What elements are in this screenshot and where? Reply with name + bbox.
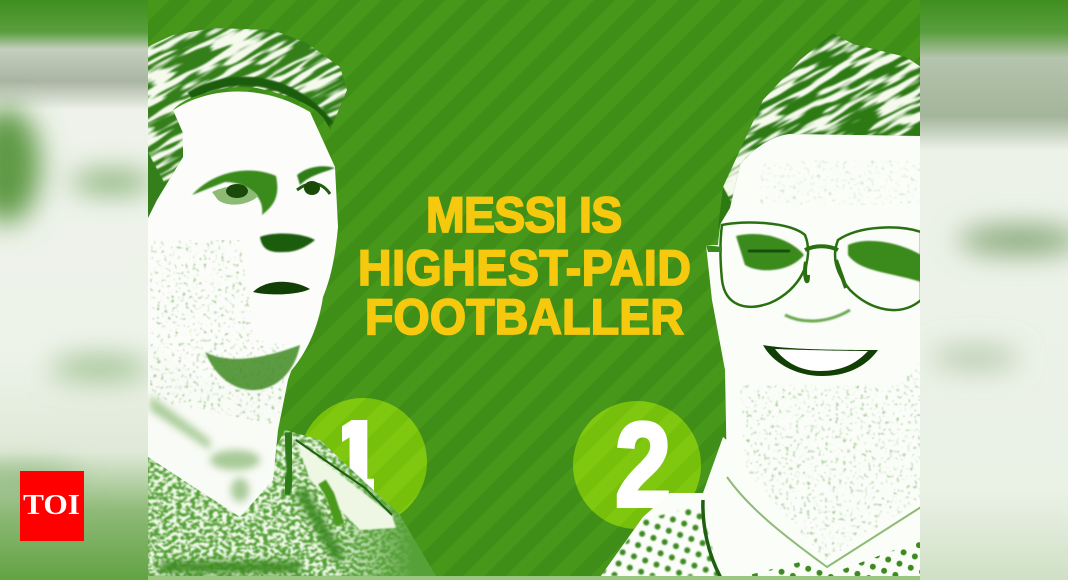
Messi chin shadow [205, 345, 300, 390]
Messi sleeve highlight [286, 432, 396, 530]
badge: number 2: 2 [615, 399, 671, 532]
Ronaldo smile [763, 345, 878, 376]
Ronaldo shirt and collar [598, 437, 921, 580]
portrait: Ronaldo [600, 33, 920, 576]
footer strip [148, 576, 920, 580]
Messi face [148, 91, 338, 380]
Messi neck shading [150, 395, 260, 502]
title [358, 187, 691, 345]
Messi nose [260, 234, 315, 252]
Ronaldo glasses [706, 222, 921, 310]
portrait: Messi [148, 28, 436, 576]
Ronaldo hair [718, 33, 920, 228]
panel: striped green background [148, 0, 920, 580]
title: HIGHEST-PAID [358, 240, 691, 296]
Messi eyes and brows [192, 166, 335, 215]
Messi shirt [148, 430, 438, 576]
logo: TOI: TOI [23, 489, 80, 521]
title: MESSI IS [426, 187, 622, 243]
Messi skin texture [150, 240, 288, 425]
panel: blurred right backdrop [920, 0, 1068, 580]
Messi mouth [253, 282, 310, 294]
Ronaldo skin texture [740, 160, 921, 560]
badge: number 2 [573, 399, 701, 532]
Ronaldo nose [785, 310, 850, 321]
Ronaldo jaw outline [727, 477, 921, 567]
Messi neck and collar [148, 340, 292, 517]
badge: number 1: 1 [328, 401, 384, 513]
Messi hair [148, 28, 347, 218]
Ronaldo head [706, 134, 920, 500]
badge: number 1 [305, 398, 427, 514]
title: FOOTBALLER [365, 289, 684, 345]
logo: TOI [20, 471, 84, 541]
panel: blurred left backdrop [0, 0, 154, 580]
